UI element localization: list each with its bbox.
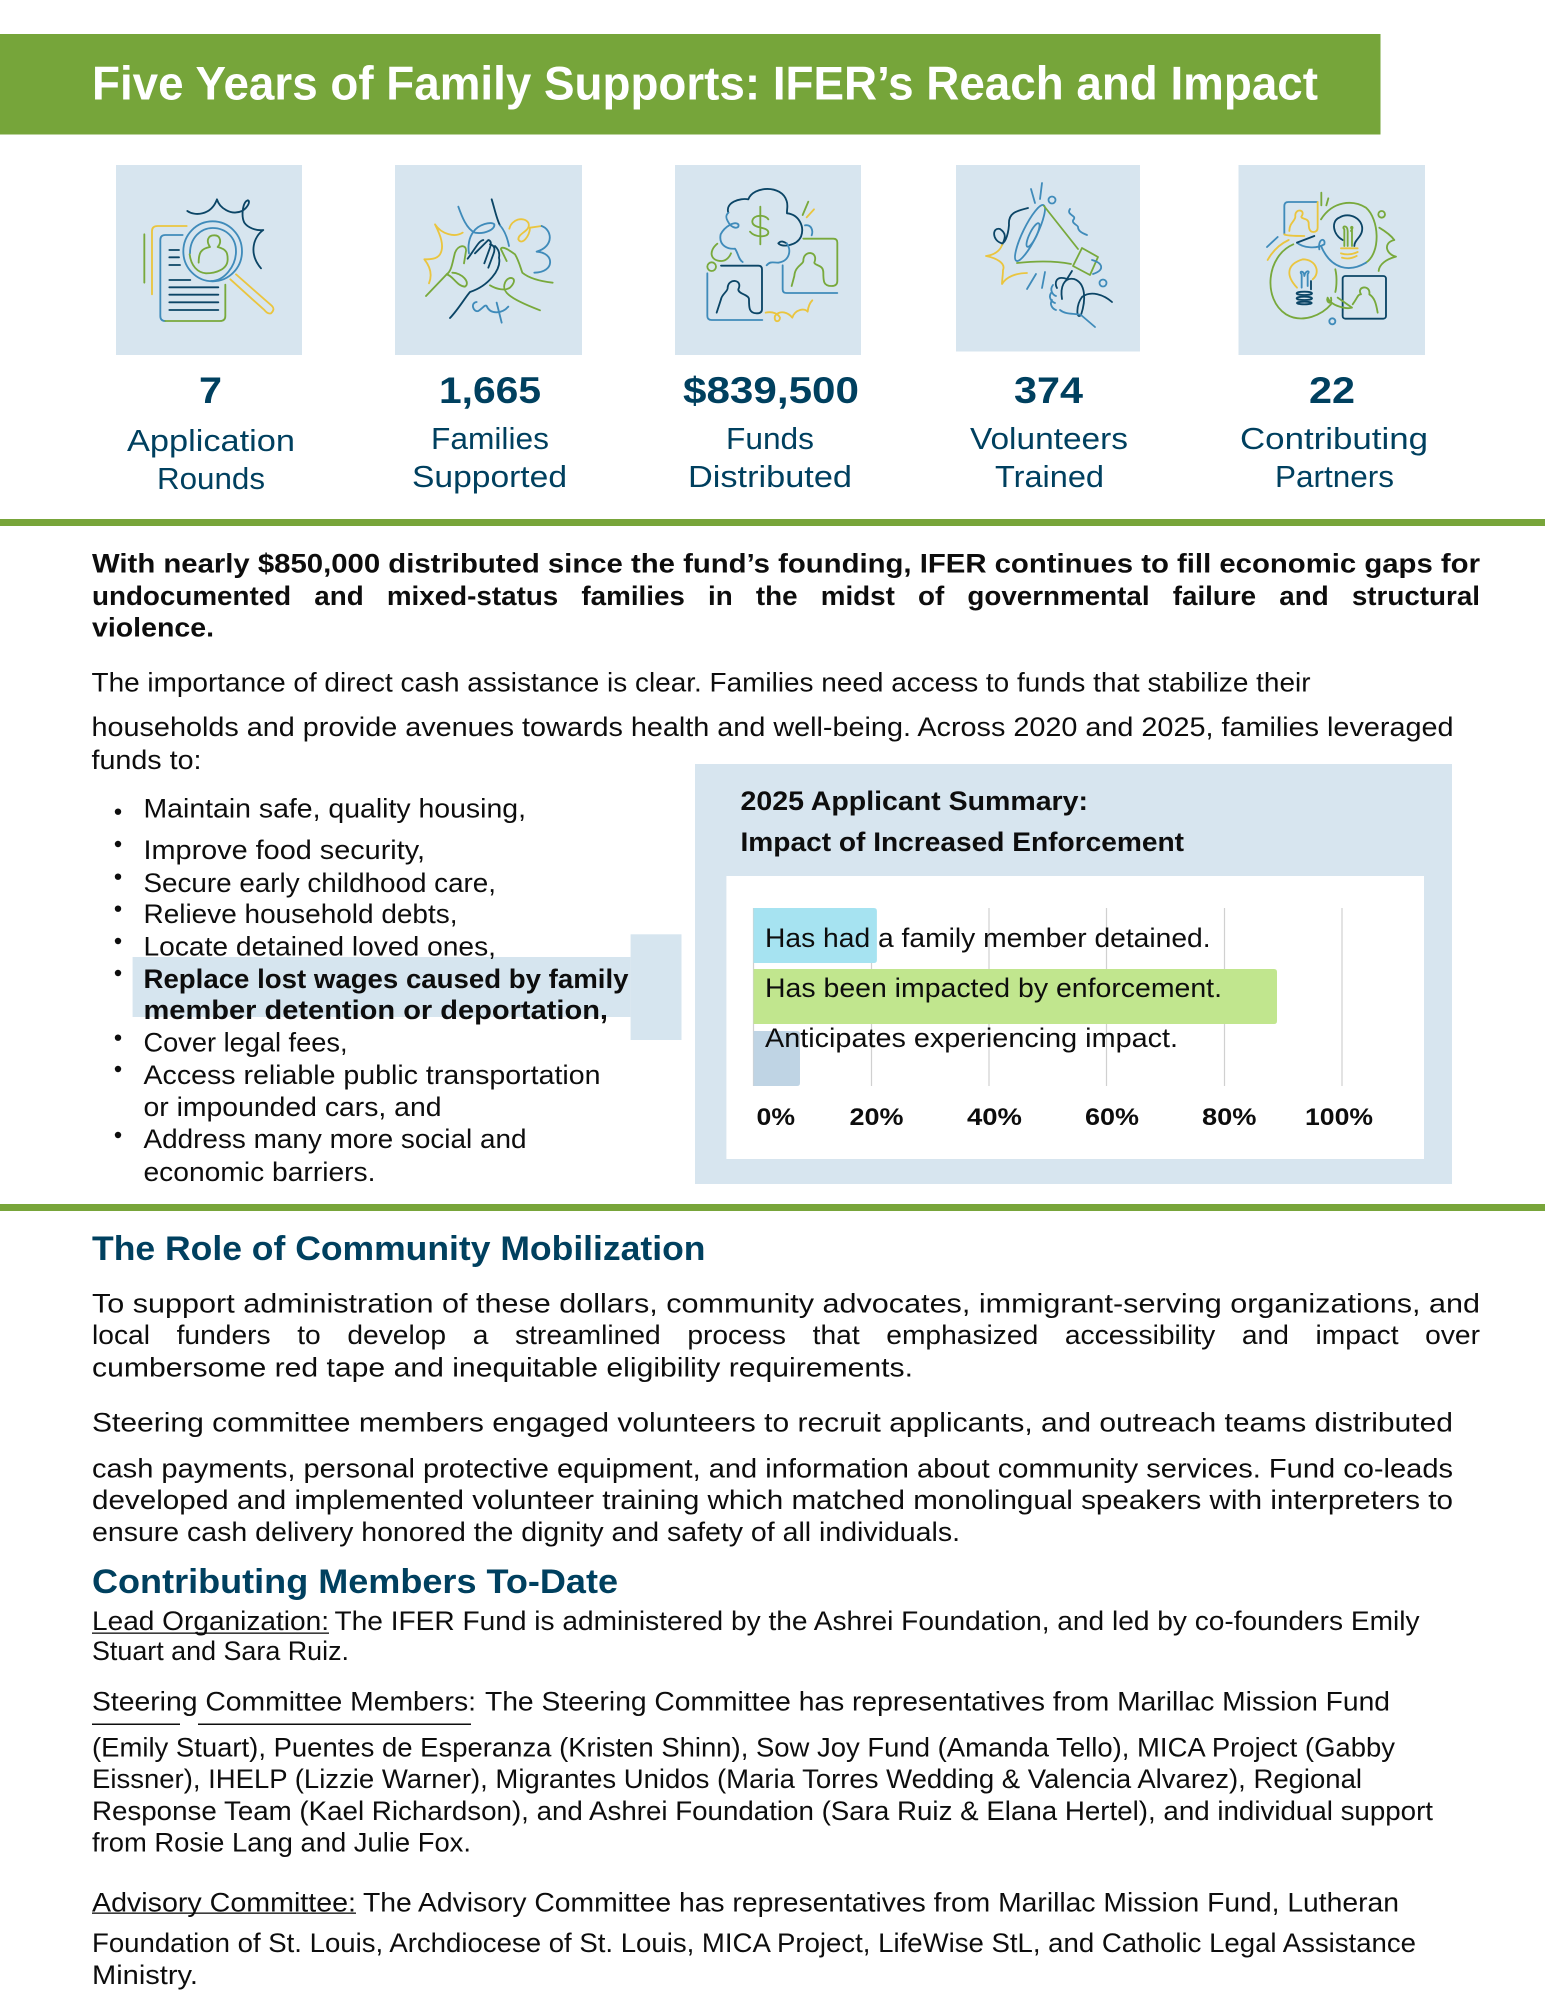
- steering committee members: Steering Committee Members:: [92, 1687, 476, 1717]
- lead organization: Stuart and Sara Ruiz.: [92, 1636, 349, 1666]
- title banner: [0, 34, 1380, 134]
- x axis labels: 100%: [1305, 1104, 1373, 1131]
- intro paragraph: funds to:: [92, 745, 202, 775]
- steering committee members: from Rosie Lang and Julie Fox.: [92, 1828, 471, 1858]
- lead statement: [92, 549, 1481, 643]
- x axis labels: 80%: [1202, 1104, 1256, 1131]
- intro paragraph: households and provide avenues towards health and well-being. Across 2020 and 2025, families leveraged: [92, 712, 1454, 742]
- icon: joined hands: [424, 199, 553, 323]
- x axis labels: [756, 1104, 1373, 1131]
- stat: funds distributed: [675, 165, 861, 494]
- icon: light bulbs and people: [1267, 193, 1396, 324]
- stat: volunteers trained: [956, 165, 1140, 494]
- bullet list: Address many more social and: [144, 1124, 526, 1154]
- label: Funds: [726, 421, 814, 456]
- bar: detained: [754, 908, 877, 963]
- paragraph: steering committee: cash payments, personal protective equipment, and information about community services. Fund co-leads: [92, 1454, 1453, 1484]
- bar: anticipates: [754, 1031, 800, 1086]
- paragraph: steering committee: ensure cash delivery honored the dignity and safety of all individuals.: [92, 1517, 960, 1547]
- lead statement: With nearly $850,000 distributed since the fund’s founding, IFER continues to fill economic gaps for: [92, 549, 1481, 579]
- paragraph: steering committee: Steering committee members engaged volunteers to recruit applicants, and outreach teams distributed: [92, 1408, 1453, 1438]
- bullet list: economic barriers.: [144, 1157, 376, 1187]
- steering committee members: The Steering Committee has representatives from Marillac Mission Fund: [485, 1687, 1390, 1717]
- lead organization: The IFER Fund is administered by the Ashrei Foundation, and led by co-founders Emily: [334, 1606, 1420, 1636]
- number: $839,500: [683, 369, 859, 411]
- bar chart: Has been impacted by enforcement.: [765, 973, 1222, 1003]
- highlight arrow behind key bullet: [133, 934, 682, 1040]
- title banner: Five Years of Family Supports: IFER’s Reach and Impact: [92, 56, 1318, 110]
- bullet list: member detention or deportation,: [144, 995, 608, 1025]
- number: 22: [1309, 369, 1355, 411]
- icon: money cloud between people: [707, 189, 837, 321]
- bullet list: Replace lost wages caused by family: [144, 964, 628, 994]
- advisory committee: Ministry.: [92, 1960, 198, 1990]
- paragraph: administration: local funders to develop a streamlined process that emphasized accessibility and impact over: [92, 1320, 1480, 1350]
- bullet list: Improve food security,: [144, 835, 425, 865]
- stat: contributing partners: [1238, 165, 1428, 494]
- stat: application rounds: [116, 165, 302, 496]
- paragraph: administration: [92, 1289, 1480, 1383]
- intro paragraph: The importance of direct cash assistance is clear. Families need access to funds that stabilize their: [92, 668, 1311, 698]
- stat: volunteers trained: Trained: [995, 459, 1104, 494]
- panel heading: [740, 786, 1184, 857]
- bar chart: [754, 908, 1373, 1131]
- lead statement: undocumented and mixed-status families in the midst of governmental failure and structural: [92, 581, 1480, 611]
- label: Families: [431, 421, 549, 456]
- bullet list: Locate detained loved ones,: [144, 932, 496, 962]
- advisory committee: Advisory Committee:: [92, 1888, 356, 1918]
- label: Contributing: [1240, 421, 1428, 456]
- bullet list: Relieve household debts,: [144, 899, 457, 929]
- paragraph: administration: cumbersome red tape and inequitable eligibility requirements.: [92, 1353, 913, 1383]
- bullet list: Access reliable public transportation: [144, 1060, 600, 1090]
- stat: contributing partners: Partners: [1275, 459, 1394, 494]
- lead organization: Lead Organization:: [92, 1606, 329, 1636]
- bar: impacted: [754, 969, 1277, 1024]
- label: Volunteers: [970, 421, 1128, 456]
- stat: families supported: Supported: [412, 459, 567, 494]
- advisory committee: The Advisory Committee has representatives from Marillac Mission Fund, Lutheran: [363, 1888, 1399, 1918]
- bullet list: or impounded cars, and: [144, 1092, 442, 1122]
- number: 1,665: [439, 369, 541, 411]
- bullet list: [115, 794, 629, 1187]
- steering committee members: Response Team (Kael Richardson), and Ashrei Foundation (Sara Ruiz & Elana Hertel), and individual support: [92, 1796, 1434, 1826]
- label: Application: [127, 423, 295, 458]
- icon: magnifying glass over document: [144, 199, 273, 321]
- steering committee members: [92, 1687, 1434, 1858]
- bullet list: Maintain safe, quality housing,: [144, 794, 526, 824]
- paragraph: steering committee: developed and implemented volunteer training which matched monolingual speakers with interpreters to: [92, 1485, 1453, 1515]
- stat: application rounds: Rounds: [157, 461, 265, 496]
- bar chart: Anticipates experiencing impact.: [765, 1023, 1178, 1053]
- lead statement: violence.: [92, 613, 214, 643]
- stat: funds distributed: Distributed: [688, 459, 852, 494]
- stat: families supported: [395, 165, 582, 494]
- bullet list: Cover legal fees,: [144, 1028, 348, 1058]
- number: 7: [199, 369, 222, 411]
- heading: community mobilization: The Role of Community Mobilization: [92, 1230, 706, 1268]
- x axis labels: 40%: [967, 1104, 1022, 1131]
- bullet list: Secure early childhood care,: [144, 868, 496, 898]
- intro paragraph: [92, 668, 1454, 775]
- panel heading: 2025 Applicant Summary:: [740, 786, 1088, 816]
- panel heading: Impact of Increased Enforcement: [740, 827, 1184, 857]
- lead organization: [92, 1606, 1420, 1666]
- advisory committee: [92, 1888, 1416, 1990]
- icon: megaphone: [986, 183, 1112, 327]
- advisory committee: Foundation of St. Louis, Archdiocese of St. Louis, MICA Project, LifeWise StL, and Catholic Legal Assistance: [92, 1928, 1416, 1958]
- paragraph: administration: To support administration of these dollars, community advocates, immigrant-serving organizations, and: [92, 1289, 1480, 1319]
- panel: 2025 applicant summary: [695, 764, 1452, 1184]
- x axis labels: 20%: [850, 1104, 904, 1131]
- x axis labels: 0%: [756, 1104, 795, 1131]
- bar chart: Has had a family member detained.: [765, 923, 1211, 953]
- heading: contributing members: Contributing Members To-Date: [92, 1563, 618, 1601]
- steering committee members: (Emily Stuart), Puentes de Esperanza (Kristen Shinn), Sow Joy Fund (Amanda Tello), MICA Project (Gabby: [92, 1733, 1395, 1763]
- number: 374: [1014, 369, 1083, 411]
- steering committee members: Eissner), IHELP (Lizzie Warner), Migrantes Unidos (Maria Torres Wedding & Valencia Alvarez), Regional: [92, 1764, 1362, 1794]
- x axis labels: 60%: [1085, 1104, 1139, 1131]
- paragraph: steering committee: [92, 1408, 1453, 1547]
